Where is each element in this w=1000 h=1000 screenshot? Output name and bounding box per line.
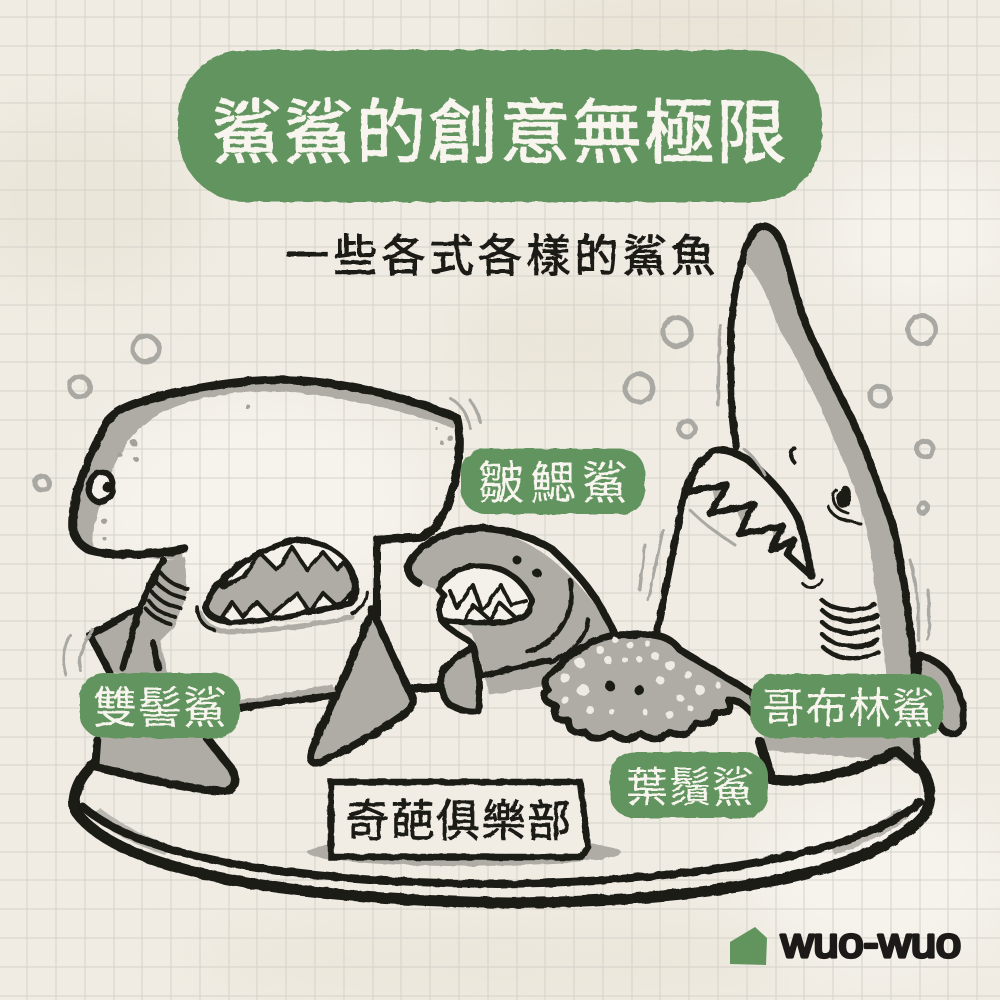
label: goblin shark: 哥布林鯊 bbox=[762, 685, 934, 732]
gills bbox=[822, 600, 878, 658]
logo bbox=[730, 919, 961, 966]
motion lines bbox=[63, 398, 480, 675]
hammerhead shark bbox=[63, 380, 480, 791]
back outline bbox=[408, 528, 614, 633]
platform back edge bbox=[240, 688, 442, 706]
lower jaw bbox=[441, 620, 549, 676]
body bbox=[408, 528, 614, 695]
title banner bbox=[178, 50, 822, 202]
teeth bbox=[450, 585, 526, 620]
belly base bbox=[760, 742, 917, 780]
nostril bbox=[791, 448, 794, 462]
open mouth bbox=[438, 566, 532, 623]
label: hammerhead: 雙髻鯊 bbox=[93, 684, 227, 733]
display platform bbox=[74, 688, 930, 903]
head shading bbox=[73, 380, 457, 553]
gray body band bbox=[745, 227, 917, 762]
mouth bbox=[205, 540, 355, 622]
skin dots bbox=[101, 404, 453, 541]
eye bbox=[86, 470, 116, 504]
snout and back outline bbox=[731, 226, 917, 763]
sign text: 奇葩俱樂部 bbox=[345, 797, 571, 846]
lower teeth bbox=[222, 593, 352, 622]
platform inner rim bbox=[82, 802, 920, 884]
label: frilled shark bbox=[461, 449, 645, 514]
platform front edge bbox=[74, 758, 930, 903]
wordmark: wuo-wuo bbox=[780, 919, 961, 966]
jaw zigzag teeth bbox=[687, 485, 809, 574]
upper teeth bbox=[222, 541, 345, 587]
bubbles bbox=[35, 316, 936, 513]
icon: green house bbox=[730, 927, 767, 965]
wobbegong shark bbox=[544, 634, 758, 739]
tail fin outline bbox=[95, 738, 235, 791]
right body fin bbox=[310, 610, 414, 763]
gills bbox=[528, 580, 588, 662]
subtitle: 一些各式各樣的鯊魚 bbox=[285, 232, 715, 281]
spots bbox=[560, 637, 721, 719]
label: hammerhead bbox=[80, 673, 240, 738]
title text: 鯊鯊的創意無極限 bbox=[212, 94, 786, 172]
label: frilled shark: 皺鰓鯊 bbox=[478, 457, 628, 509]
gills bbox=[146, 572, 188, 624]
sign: oddball club bbox=[307, 782, 621, 866]
torso and fins fill bbox=[90, 557, 187, 675]
lip shadow bbox=[200, 613, 352, 632]
eyes bbox=[512, 556, 522, 564]
platform front rim shade bbox=[92, 808, 908, 855]
label: wobbegong bbox=[610, 752, 768, 818]
label: goblin shark bbox=[750, 674, 943, 738]
goblin shark bbox=[640, 226, 964, 780]
jaw teeth shading bbox=[712, 487, 785, 545]
frilled shark bbox=[408, 528, 614, 712]
head outline bbox=[73, 380, 460, 555]
jaw thick lip bbox=[687, 450, 811, 576]
eye bbox=[834, 485, 854, 509]
pectoral fin bbox=[441, 647, 480, 712]
label: wobbegong: 葉鬚鯊 bbox=[626, 764, 754, 811]
body outline bbox=[90, 540, 413, 708]
throat outline bbox=[656, 491, 685, 637]
lower fin bbox=[915, 655, 964, 734]
eyes bbox=[605, 681, 615, 691]
body bbox=[544, 634, 758, 739]
shade lines bbox=[640, 325, 930, 640]
chin mark bbox=[803, 580, 822, 587]
